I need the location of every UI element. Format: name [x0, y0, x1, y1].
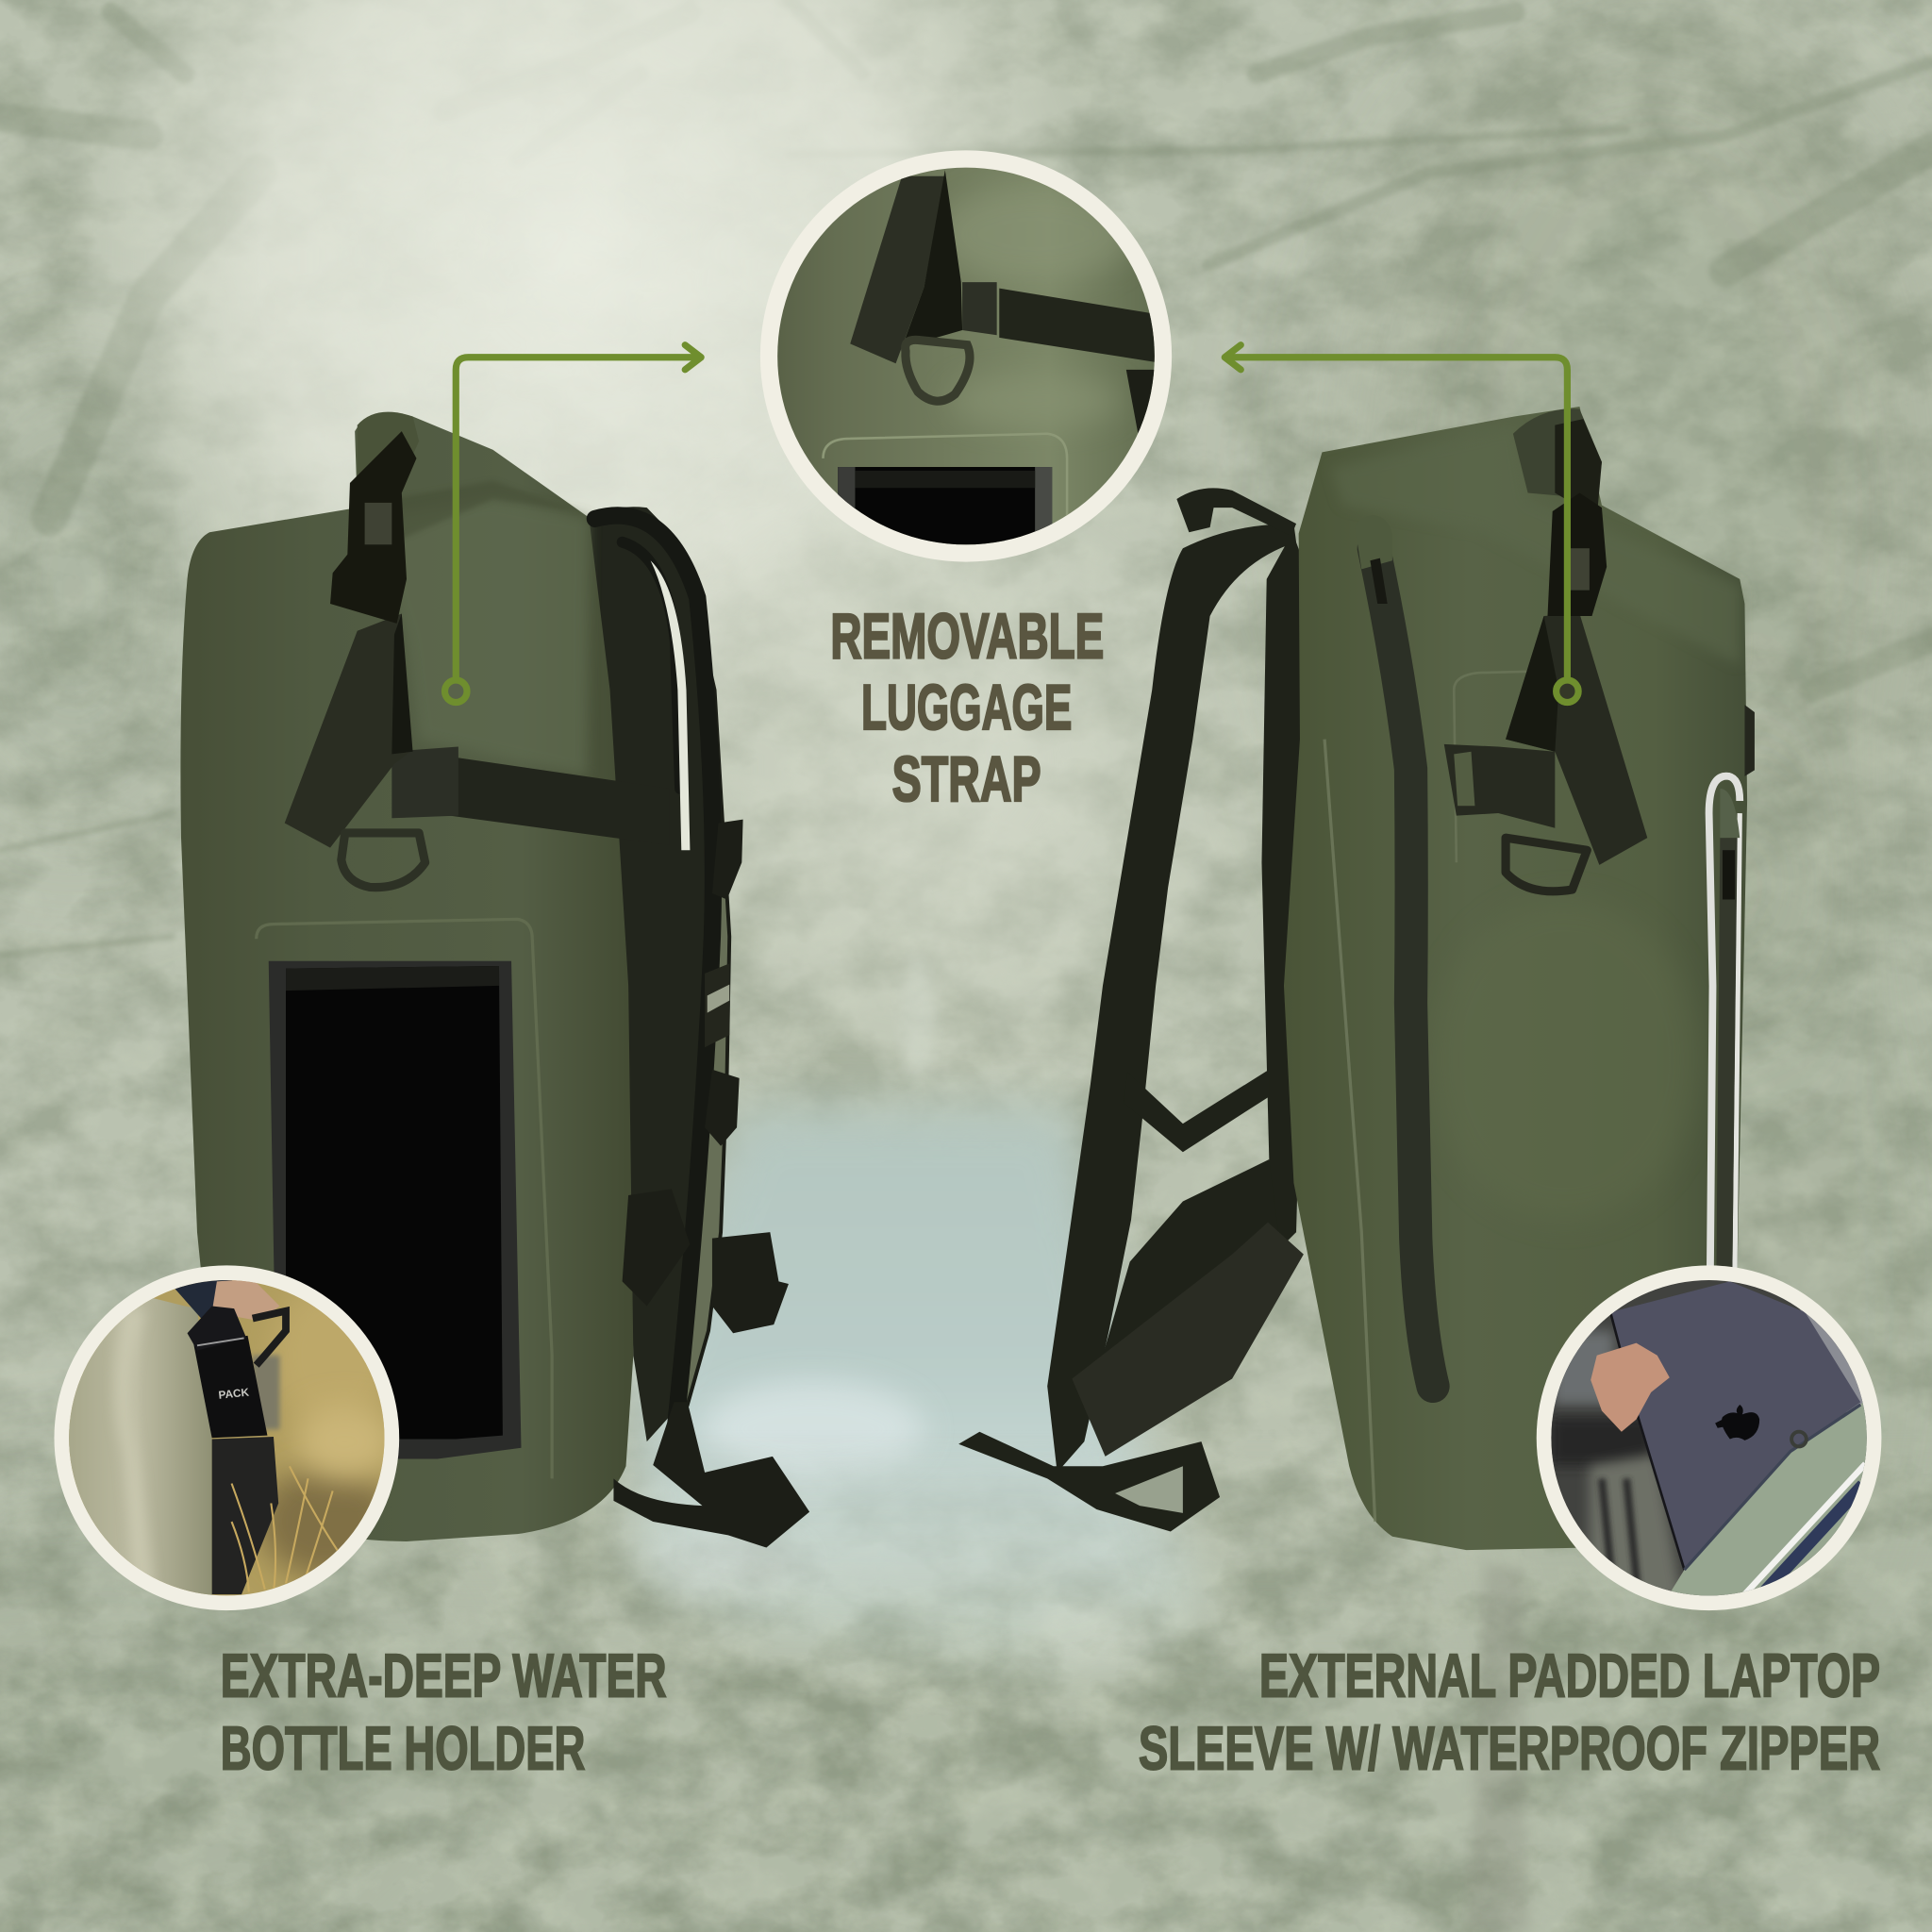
left bag back panel sliver: [672, 573, 729, 1405]
heading: external padded laptop sleeve: [1139, 1641, 1880, 1783]
heading: extra-deep water bottle holder: EXTRA-DEEP WATER: [221, 1641, 667, 1710]
heading: removable luggage strap: REMOVABLE: [830, 601, 1104, 672]
background gap between tubes: [651, 560, 690, 850]
luggage strap right: [1506, 613, 1647, 865]
left bag body: [180, 412, 633, 1541]
seal patch: [1454, 672, 1528, 862]
lake: [641, 955, 1208, 1675]
hand: [1591, 1343, 1670, 1432]
roll-top buckle and strap: [330, 412, 419, 624]
seal panel outline: [257, 919, 552, 1478]
heading: removable luggage strap: [830, 601, 1104, 815]
mesh pocket: [269, 961, 521, 1458]
connector arrow: right bag to luggage strap: [1224, 345, 1567, 679]
backpack: right view: [958, 407, 1755, 1550]
callout circle: laptop sleeve detail: [1537, 1265, 1881, 1610]
side strap and D-ring: [1444, 744, 1587, 891]
laptop sleeve zipper: [1709, 776, 1740, 1269]
horizontal strap with buckle: [391, 747, 669, 845]
side clips and buckles: [613, 820, 809, 1547]
tree branches: [0, 0, 1932, 955]
heading: removable luggage strap: STRAP: [892, 744, 1041, 815]
top handle: [1176, 488, 1296, 536]
D-ring: [341, 833, 425, 888]
heading: extra-deep water bottle holder: [221, 1641, 667, 1783]
marker dot: right: [1557, 680, 1578, 702]
bottle logo text: PACK: [218, 1386, 250, 1402]
heading: extra-deep water bottle holder: BOTTLE HOLDER: [221, 1714, 585, 1783]
callout circle: water bottle holder detail: [54, 1265, 399, 1610]
marker dot: left: [445, 680, 467, 702]
main waterproof zipper: [1356, 515, 1433, 1386]
shoulder tubes: [595, 515, 713, 1454]
reflective patch: [705, 963, 729, 1047]
foreground foliage: [12, 1462, 1932, 1932]
roll-top and buckle right: [1513, 408, 1607, 616]
apple logo: [1715, 1405, 1759, 1441]
bottom strap tab: [613, 1402, 809, 1547]
left bag harness behind body: [589, 507, 716, 1441]
hanging luggage strap: [285, 613, 413, 848]
right bag harness: [958, 488, 1309, 1532]
callout circle: luggage strap detail: [760, 150, 1172, 562]
backpack: left view: [180, 412, 809, 1547]
connector arrow: left bag to luggage strap: [456, 345, 701, 679]
right bag body: [1284, 407, 1747, 1550]
heading: removable luggage strap: LUGGAGE: [861, 673, 1072, 743]
